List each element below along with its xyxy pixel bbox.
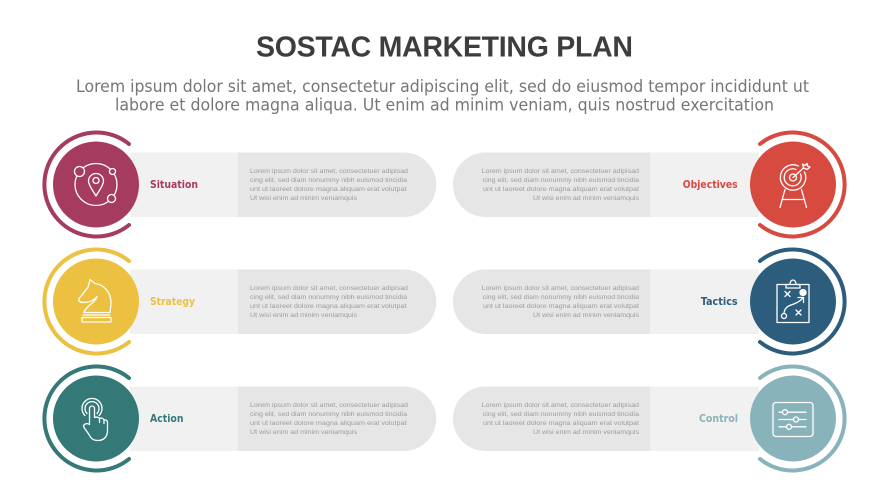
panel: strategy — [44, 250, 436, 354]
description: strategy: Lorem ipsum dolor sit amet, consectetuer adipisad — [250, 285, 408, 292]
description: strategy — [250, 285, 408, 319]
icon: control sliders — [773, 402, 813, 436]
description: control — [482, 402, 640, 436]
description: tactics: cing elit, sed diam nonummy nibh euismod tincidia — [483, 294, 639, 301]
icon: archery target — [780, 164, 810, 208]
label: control: Control — [699, 413, 738, 425]
icon: location orbit — [74, 164, 117, 206]
panel: tactics — [453, 250, 845, 354]
panel: control — [453, 366, 845, 470]
description: control: Lorem ipsum dolor sit amet, consectetuer adipisad — [482, 402, 639, 409]
icon: tactics clipboard — [777, 280, 809, 322]
description: objectives: Ut wisi enim ad minim veniamquis — [533, 195, 640, 202]
description: situation: cing elit, sed diam nonummy nibh euismod tincidia — [250, 177, 407, 184]
icon: chess knight — [79, 280, 111, 322]
label: tactics: Tactics — [701, 296, 738, 308]
label: strategy: Strategy — [150, 296, 195, 308]
panel: action — [44, 366, 436, 471]
description: situation — [250, 168, 408, 202]
label: action: Action — [150, 413, 184, 425]
description: objectives — [482, 168, 640, 202]
subtitle text block: labore et dolore magna aliqua. Ut enim ad minim veniam, quis nostrud exercitation — [115, 96, 774, 114]
description: tactics: Lorem ipsum dolor sit amet, consectetuer adipisad — [482, 285, 639, 292]
icon: touch hand — [82, 398, 108, 440]
description: strategy: cing elit, sed diam nonummy nibh euismod tincidia — [250, 294, 407, 301]
description: control: Ut wisi enim ad minim veniamquis — [533, 429, 640, 436]
description: strategy: Ut wisi enim ad minim veniamquis — [250, 312, 358, 319]
label: situation: Situation — [150, 179, 198, 191]
description: action — [250, 402, 408, 436]
subtitle text block: Lorem ipsum dolor sit amet, consectetur adipiscing elit, sed do eiusmod tempor incididunt ut — [76, 77, 809, 96]
description: strategy: unt ut laoreet dolore magna aliquam erat volutpat — [250, 303, 407, 310]
description: control: cing elit, sed diam nonummy nibh euismod tincidia — [483, 411, 639, 418]
description: action: Lorem ipsum dolor sit amet, consectetuer adipisad — [250, 402, 408, 409]
description: situation: unt ut laoreet dolore magna aliquam erat volutpat — [250, 186, 407, 193]
panel: objectives — [453, 133, 845, 236]
description: tactics — [482, 285, 640, 319]
description: objectives: cing elit, sed diam nonummy nibh euismod tincidia — [483, 177, 639, 184]
title: SOSTAC MARKETING PLAN — [256, 32, 633, 64]
label: objectives: Objectives — [683, 179, 738, 191]
description: tactics: Ut wisi enim ad minim veniamquis — [533, 312, 640, 319]
description: action: Ut wisi enim ad minim veniamquis — [250, 429, 358, 436]
description: control: unt ut laoreet dolore magna aliquam erat volutpat — [483, 420, 639, 427]
panel: situation — [44, 133, 436, 237]
subtitle text block — [76, 77, 809, 114]
description: situation: Ut wisi enim ad minim veniamquis — [250, 195, 358, 202]
description: action: unt ut laoreet dolore magna aliquam erat volutpat — [250, 420, 407, 427]
description: objectives: unt ut laoreet dolore magna aliquam erat volutpat — [483, 186, 639, 193]
description: action: cing elit, sed diam nonummy nibh euismod tincidia — [250, 411, 407, 418]
description: situation: Lorem ipsum dolor sit amet, consectetuer adipisad — [250, 168, 408, 175]
description: tactics: unt ut laoreet dolore magna aliquam erat volutpat — [483, 303, 639, 310]
description: objectives: Lorem ipsum dolor sit amet, consectetuer adipisad — [482, 168, 639, 175]
